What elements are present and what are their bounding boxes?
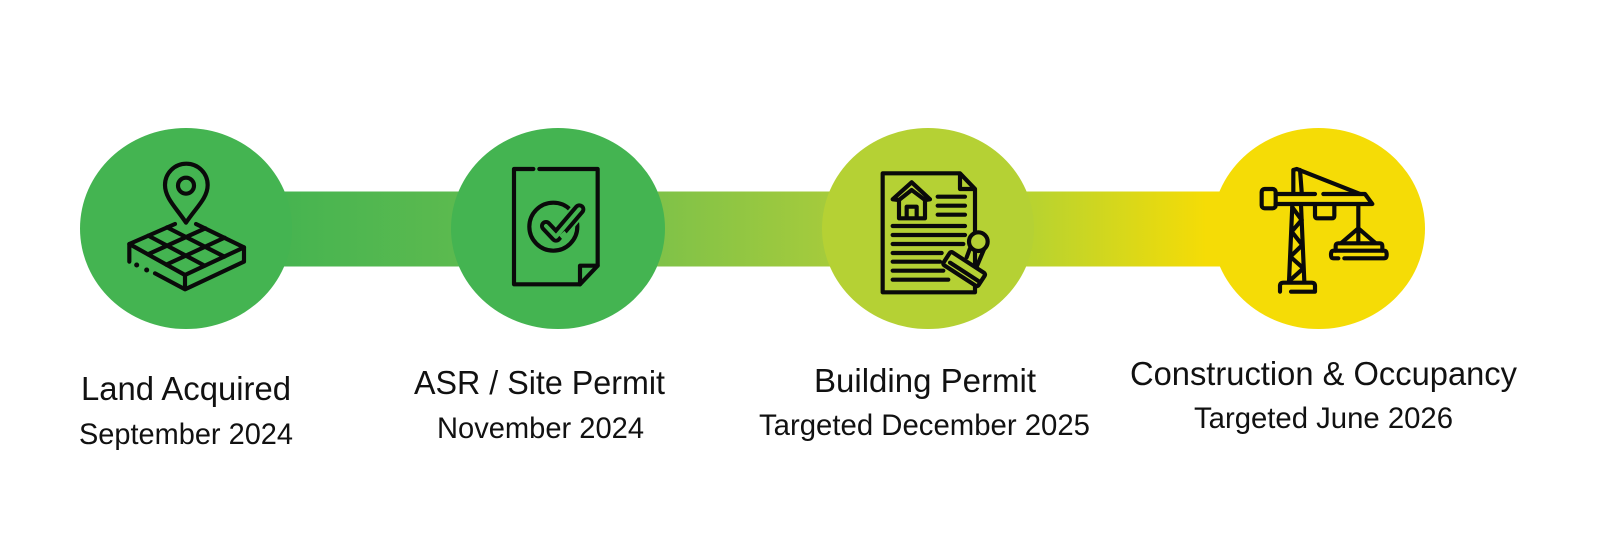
label: site permit: November 2024 [437,412,644,445]
label: building permit [759,363,1090,442]
label: site permit [414,365,666,445]
icon: house document with stamp [883,173,988,292]
step 2: site permit [451,128,665,329]
label: site permit: ASR / Site Permit [414,365,666,402]
label: land acquired [79,371,293,451]
step 2 circle [451,128,665,329]
label: construction and occupancy: Targeted June 2026 [1194,402,1453,435]
label: building permit: Targeted December 2025 [759,409,1090,442]
step 3 circle [822,128,1034,329]
label: construction and occupancy: Construction & Occupancy [1130,356,1517,393]
step 4 circle [1212,128,1425,329]
label: building permit: Building Permit [814,363,1037,400]
connector bar [280,192,1225,266]
label: land acquired: Land Acquired [81,371,291,408]
label: land acquired: September 2024 [79,418,293,451]
icon: map pin on land plot [129,164,244,289]
icon: approved document [514,169,598,284]
step 1: land acquired [80,128,292,329]
step 3: building permit [822,128,1034,329]
step 4: construction [1212,128,1425,329]
step 1 circle [80,128,292,329]
icon: tower crane [1262,169,1387,292]
label: construction and occupancy [1130,356,1517,435]
